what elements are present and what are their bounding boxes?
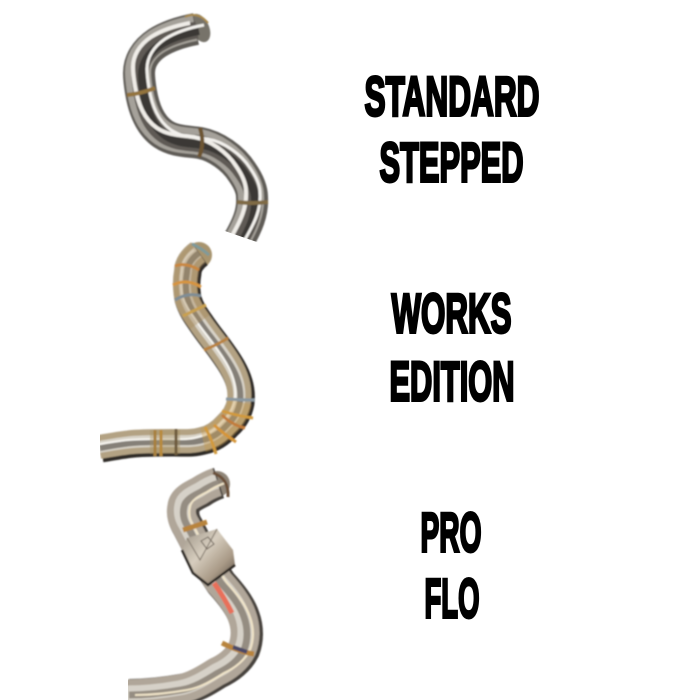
label: standard stepped	[364, 66, 540, 194]
label: works edition	[390, 282, 514, 412]
icon: catalytic converter body	[182, 529, 235, 585]
pipe: standard stepped	[127, 11, 268, 247]
label: pro flo: PRO	[420, 502, 482, 564]
label: works edition: WORKS	[392, 282, 512, 344]
label: standard stepped: STEPPED	[380, 132, 524, 194]
pipe: works edition	[95, 242, 255, 456]
label: pro flo: FLO	[424, 568, 480, 630]
label: pro flo	[420, 502, 482, 630]
label: standard stepped: STANDARD	[364, 66, 540, 128]
pipe: pro flo	[127, 471, 254, 695]
label: works edition: EDITION	[390, 350, 514, 412]
